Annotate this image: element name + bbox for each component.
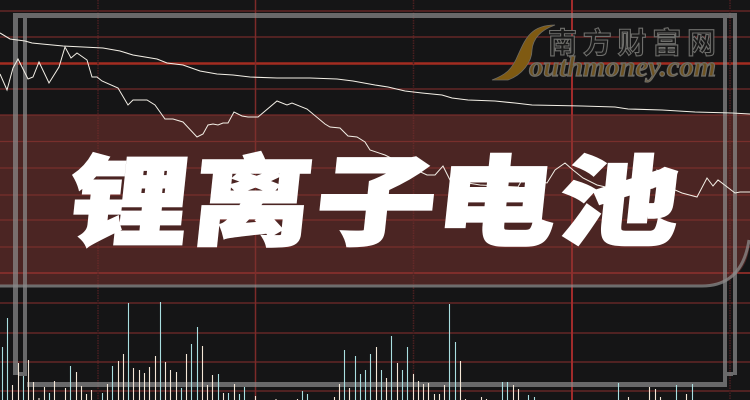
watermark logo: southmoney [492, 25, 716, 83]
title [64, 149, 685, 258]
watermark url: outhmoney.com [529, 52, 716, 83]
title: 电 [431, 149, 562, 258]
title: 池 [554, 149, 685, 258]
logo swoosh [492, 25, 555, 80]
upper line chart [0, 33, 750, 114]
volume bars chart [2, 302, 692, 400]
title: 锂 [64, 149, 195, 258]
panel: title band [0, 115, 750, 285]
title: 离 [187, 149, 318, 258]
title: 子 [311, 149, 442, 258]
panel border [0, 240, 749, 286]
watermark chinese name: 南方财富网 [548, 27, 716, 60]
lower line chart [0, 47, 750, 197]
